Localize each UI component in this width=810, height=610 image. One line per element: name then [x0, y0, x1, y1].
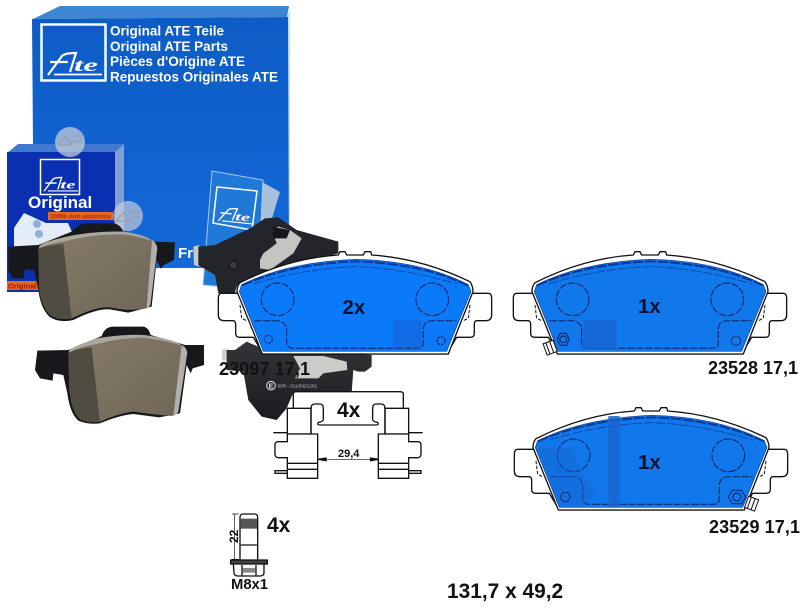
small ATE box: [7, 144, 124, 292]
box multilingual heading: Original ATE Teile: [110, 24, 224, 38]
Original label: Original: [28, 193, 92, 212]
spring clip diagram: [273, 392, 423, 478]
leaflet logo: [213, 187, 257, 230]
approval mark: [267, 381, 318, 390]
left silver clip: [193, 245, 199, 267]
Fr label on box: Fr: [178, 245, 193, 262]
wear sensor: [543, 340, 557, 355]
bolt diagram: [227, 514, 291, 593]
quantity 1x: 1x: [638, 451, 661, 474]
quantity 4x: 4x: [337, 399, 361, 422]
small box side: [115, 144, 124, 292]
quantity 4x: 4x: [267, 514, 291, 537]
backing plate: [35, 327, 204, 424]
small box logo: [40, 160, 80, 194]
pad diagram 23528: [513, 252, 787, 355]
part number 23097: 23097 17,1: [219, 359, 310, 379]
box top flap: [33, 6, 289, 19]
box multilingual heading: Original ATE Parts: [110, 39, 228, 54]
quantity 2x: 2x: [342, 296, 366, 319]
dark chamfer: [68, 347, 100, 422]
part number 23529: 23529 17,1: [709, 517, 800, 537]
small box top: [7, 144, 124, 153]
rivet: [229, 261, 237, 269]
brake pad photo top left: [8, 223, 175, 321]
clip drawing: [273, 392, 423, 478]
black pad rear upper: [193, 217, 338, 293]
wear sensor: [744, 496, 759, 511]
leaflet on box: [203, 171, 280, 290]
pad diagram 2x: [218, 252, 492, 354]
box side edge: [287, 8, 290, 268]
ATE logo square: [42, 24, 106, 80]
friction surface: [38, 232, 153, 319]
orange strip: Original C: [8, 282, 44, 290]
silver spring: [260, 227, 302, 270]
pad outline and blue surface: [514, 408, 788, 511]
large ATE box: [32, 6, 290, 268]
pad diagram 23529: [514, 408, 788, 511]
box multilingual heading: Pièces d'Origine ATE: [110, 54, 245, 69]
hex nut: [557, 333, 569, 345]
pad outline and blue surface: [218, 252, 492, 354]
left silver clip: [222, 348, 227, 361]
dimension 22: 22: [227, 529, 241, 543]
watermark 2: [113, 201, 143, 231]
pad outline and blue surface: [513, 252, 787, 355]
hex nut: [728, 490, 746, 504]
watermark 1: [55, 127, 85, 157]
top edge: [39, 232, 152, 248]
leaflet cover: [203, 171, 263, 290]
pad dimensions: 131,7 x 49,2: [447, 580, 563, 603]
pad illustration on box: [14, 213, 72, 262]
part number 23528: 23528 17,1: [708, 358, 798, 378]
approval mark: 90R - 011356/1281: [277, 383, 318, 389]
silver edge: [173, 345, 187, 416]
grey leaflet pages: [258, 182, 280, 240]
black pad rear lower: [222, 342, 372, 420]
non asbestos label: 100% non asbestos: [50, 214, 111, 220]
top edge: [69, 335, 182, 353]
dimension 29,4: 29,4: [338, 448, 360, 460]
box multilingual heading: Repuestos Originales ATE: [110, 70, 278, 84]
watermark badges: [55, 127, 143, 231]
silver edge: [147, 240, 157, 308]
backing plate: [8, 223, 175, 321]
brake pad photo lower left: [35, 327, 204, 424]
box front face: [32, 17, 289, 268]
spring slot: [272, 227, 290, 238]
friction surface: [68, 335, 182, 422]
bolt drawing: [231, 514, 267, 576]
dark chamfer: [38, 244, 72, 319]
backing plate: [198, 217, 338, 293]
silver spring tab: [293, 356, 347, 378]
thread M8x1: M8x1: [231, 577, 268, 593]
quantity 1x: 1x: [638, 295, 661, 318]
box multilingual heading: [110, 24, 278, 84]
small box front: [7, 152, 115, 292]
approval mark: E: [269, 381, 274, 390]
pad body: [227, 342, 372, 420]
